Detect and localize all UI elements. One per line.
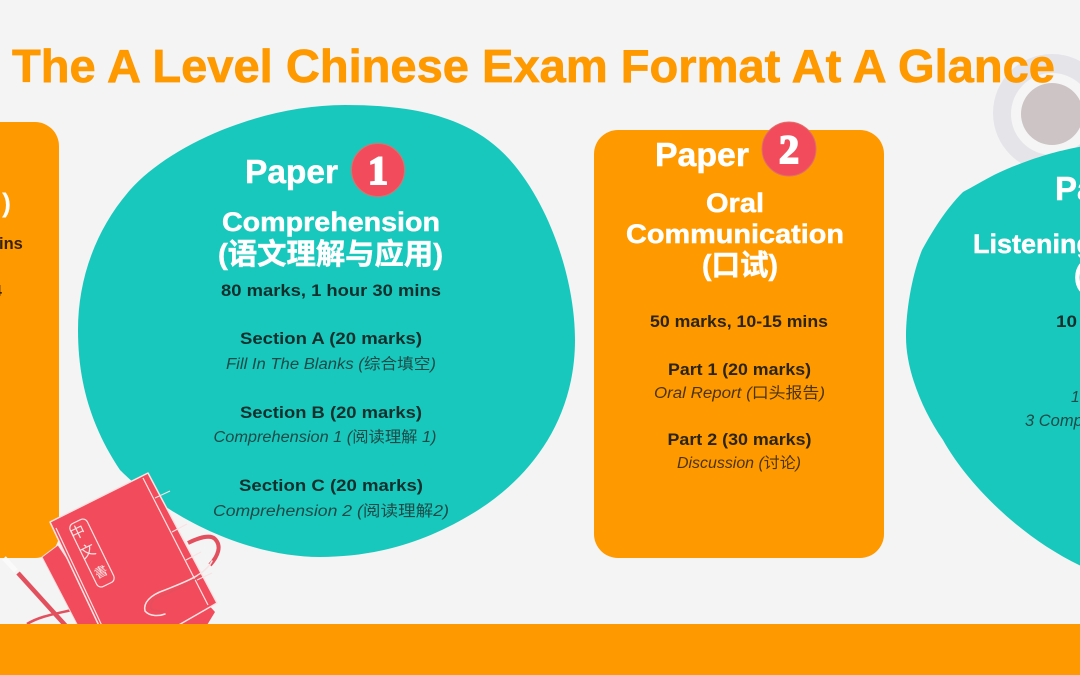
panel: left card partial (0, 122, 59, 558)
badge: number 1: 1 (368, 148, 388, 193)
paper 2 title: Oral (706, 188, 764, 218)
pencil (18, 573, 66, 626)
badge: number 2 (762, 122, 816, 176)
badge: number 1 (352, 144, 404, 196)
panel: paper 1 blob: (语文理解与应用) (218, 238, 443, 271)
footer bar (0, 624, 1080, 675)
ribbon back loop (188, 537, 219, 565)
part 2: Part 2 (30 marks) (668, 431, 812, 449)
spine and stitches (143, 478, 212, 605)
back cover (42, 545, 115, 630)
section B: Section B (20 marks) (240, 404, 422, 422)
section C (213, 477, 449, 520)
section A (226, 330, 436, 373)
panel: paper 1 blob (78, 105, 575, 557)
part 1 (654, 361, 825, 402)
paper 1 marks: 80 marks, 1 hour 30 mins (221, 282, 441, 300)
panel: paper 3 blob partial (906, 145, 1080, 570)
decorative circle icon (993, 54, 1080, 172)
section B (214, 404, 436, 446)
heading: paper 1: Paper (245, 153, 338, 190)
panel: paper 2 card: (口试) (702, 249, 778, 282)
panel: paper 2 card: Communication (626, 219, 844, 249)
icon: chinese book and pencil: 書 (92, 562, 110, 582)
section B: Comprehension 1 ( 阅读理解 1) (214, 428, 436, 446)
panel: paper 2 card (594, 122, 884, 558)
ribbon front (145, 561, 212, 616)
section C: Section C (20 marks) (239, 477, 423, 495)
section C: Comprehension 2 ( 阅读理解 2) (213, 502, 449, 520)
book label (68, 517, 116, 589)
thread (27, 609, 76, 624)
paper 1 title: Comprehension (222, 207, 440, 237)
panel: paper 3 blob partial: 10 (1056, 312, 1077, 331)
heading: paper 2: Paper (655, 136, 749, 173)
front cover (50, 473, 217, 630)
part 2: Discussion (讨论) (677, 454, 801, 472)
part 1: Oral Report ( 口头报告 ) (654, 384, 825, 402)
icon: chinese book and pencil: 中 (68, 522, 89, 544)
part 2 (668, 431, 812, 472)
section A: Fill In The Blanks ( 综合填空 ) (226, 355, 436, 373)
section A: Section A (20 marks) (240, 330, 422, 348)
icon: chinese book and pencil: 文 (78, 541, 99, 563)
panel: left card partial: ) (2, 188, 11, 218)
title: The A Level Chinese Exam Format At A Glance (12, 40, 1055, 92)
icon: chinese book and pencil (4, 473, 219, 630)
part 1: Part 1 (20 marks) (668, 361, 811, 379)
panel: paper 3 blob partial: 1 (1071, 389, 1080, 406)
paper 2 marks: 50 marks, 10-15 mins (650, 313, 828, 331)
badge: number 2: 2 (779, 127, 799, 172)
